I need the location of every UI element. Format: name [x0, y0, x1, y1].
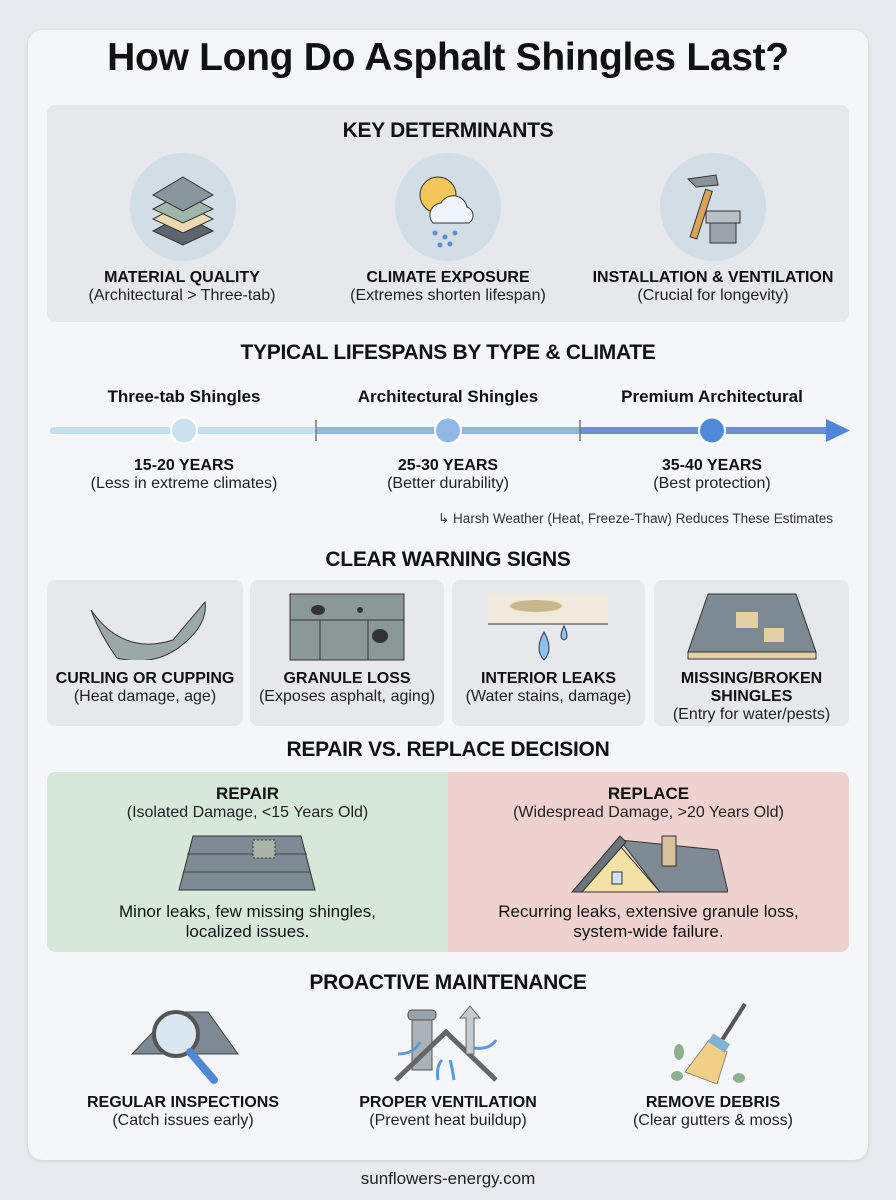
timeline: Premium Architectural [621, 387, 803, 406]
years: (Less in extreme climates) [91, 475, 277, 492]
text: climate exposure [350, 269, 546, 304]
timeline: 25-30 YEARS [398, 457, 498, 474]
panel: granule loss: GRANULE LOSS [283, 670, 411, 687]
labels: Three-tab Shingles [107, 387, 261, 406]
icon: climate [395, 153, 501, 261]
heading: key determinants: KEY DETERMINANTS [343, 119, 553, 142]
heading: lifespans: TYPICAL LIFESPANS BY TYPE & CLIMATE [240, 341, 656, 364]
heading: warning signs: CLEAR WARNING SIGNS [325, 548, 571, 571]
footer: sunflowers-energy.com [361, 1169, 535, 1188]
heading: proactive maintenance: PROACTIVE MAINTENANCE [309, 971, 587, 994]
panel: replace: system-wide failure. [573, 922, 724, 941]
panel: repair [47, 772, 448, 952]
text: debris: REMOVE DEBRIS [646, 1094, 780, 1111]
panel: replace [448, 772, 849, 952]
text: debris [633, 1094, 793, 1129]
panel: repair: localized issues. [186, 922, 309, 941]
panel: granule loss: (Exposes asphalt, aging) [259, 688, 435, 705]
panel: interior leaks [452, 580, 645, 726]
text: installation [593, 269, 833, 304]
text: material quality: MATERIAL QUALITY [104, 269, 260, 286]
text: material quality [89, 269, 275, 304]
timeline: Architectural Shingles [358, 387, 538, 406]
panel: repair: REPAIR [216, 784, 279, 803]
panel: curling: (Heat damage, age) [74, 688, 216, 705]
text: material quality: (Architectural > Three-tab) [89, 287, 275, 304]
icon: patched roof [178, 836, 316, 890]
text: ventilation: (Prevent heat buildup) [369, 1112, 527, 1129]
arrow line [50, 416, 850, 444]
icon: hammer & vent [660, 153, 766, 261]
panel: interior leaks: INTERIOR LEAKS [481, 670, 616, 687]
panel: key determinants [47, 105, 849, 322]
heading: repair vs replace: REPAIR VS. REPLACE DECISION [287, 738, 609, 761]
note: ↳ Harsh Weather (Heat, Freeze-Thaw) Reduces These Estimates [438, 511, 833, 526]
panel: missing shingles: MISSING/BROKEN [681, 670, 822, 687]
text: inspections: (Catch issues early) [112, 1112, 254, 1129]
text: installation: INSTALLATION & VENTILATION [593, 269, 833, 286]
text: inspections [87, 1094, 279, 1129]
icon: inspection [130, 1010, 239, 1084]
panel: curling [47, 580, 243, 726]
panel: missing shingles: SHINGLES [711, 688, 792, 705]
timeline: (Best protection) [653, 475, 771, 492]
icon: curled shingle [90, 601, 206, 660]
text: inspections: REGULAR INSPECTIONS [87, 1094, 279, 1111]
text: climate exposure: (Extremes shorten lifespan) [350, 287, 546, 304]
years [91, 457, 277, 492]
icon: broom [671, 1002, 747, 1085]
text: climate exposure: CLIMATE EXPOSURE [366, 269, 530, 286]
timeline: (Better durability) [387, 475, 509, 492]
panel: interior leaks: (Water stains, damage) [466, 688, 631, 705]
panel: replace: (Widespread Damage, >20 Years Old) [513, 804, 784, 821]
text: ventilation [359, 1094, 537, 1129]
panel: replace: REPLACE [608, 784, 689, 803]
timeline: 35-40 YEARS [662, 457, 762, 474]
icon: house roof [571, 835, 728, 892]
panel: repair: Minor leaks, few missing shingles, [119, 902, 376, 921]
text: debris: (Clear gutters & moss) [633, 1112, 793, 1129]
title: How Long Do Asphalt Shingles Last? [107, 36, 789, 79]
panel: curling: CURLING OR CUPPING [56, 670, 234, 687]
icon: roof missing [687, 594, 817, 660]
text: installation: (Crucial for longevity) [637, 287, 789, 304]
panel: granule loss [250, 580, 444, 726]
icon: granule [290, 594, 404, 660]
panel: replace: Recurring leaks, extensive granule loss, [498, 902, 799, 921]
timeline [50, 387, 850, 526]
panel: missing shingles: (Entry for water/pests) [673, 706, 830, 723]
icon: leak [488, 594, 608, 661]
text: ventilation: PROPER VENTILATION [359, 1094, 537, 1111]
panel: repair: (Isolated Damage, <15 Years Old) [127, 804, 368, 821]
icon: material layers [130, 153, 236, 261]
years: 15-20 YEARS [134, 457, 234, 474]
icon: ventilation [394, 1005, 498, 1082]
panel: missing shingles [654, 580, 849, 726]
